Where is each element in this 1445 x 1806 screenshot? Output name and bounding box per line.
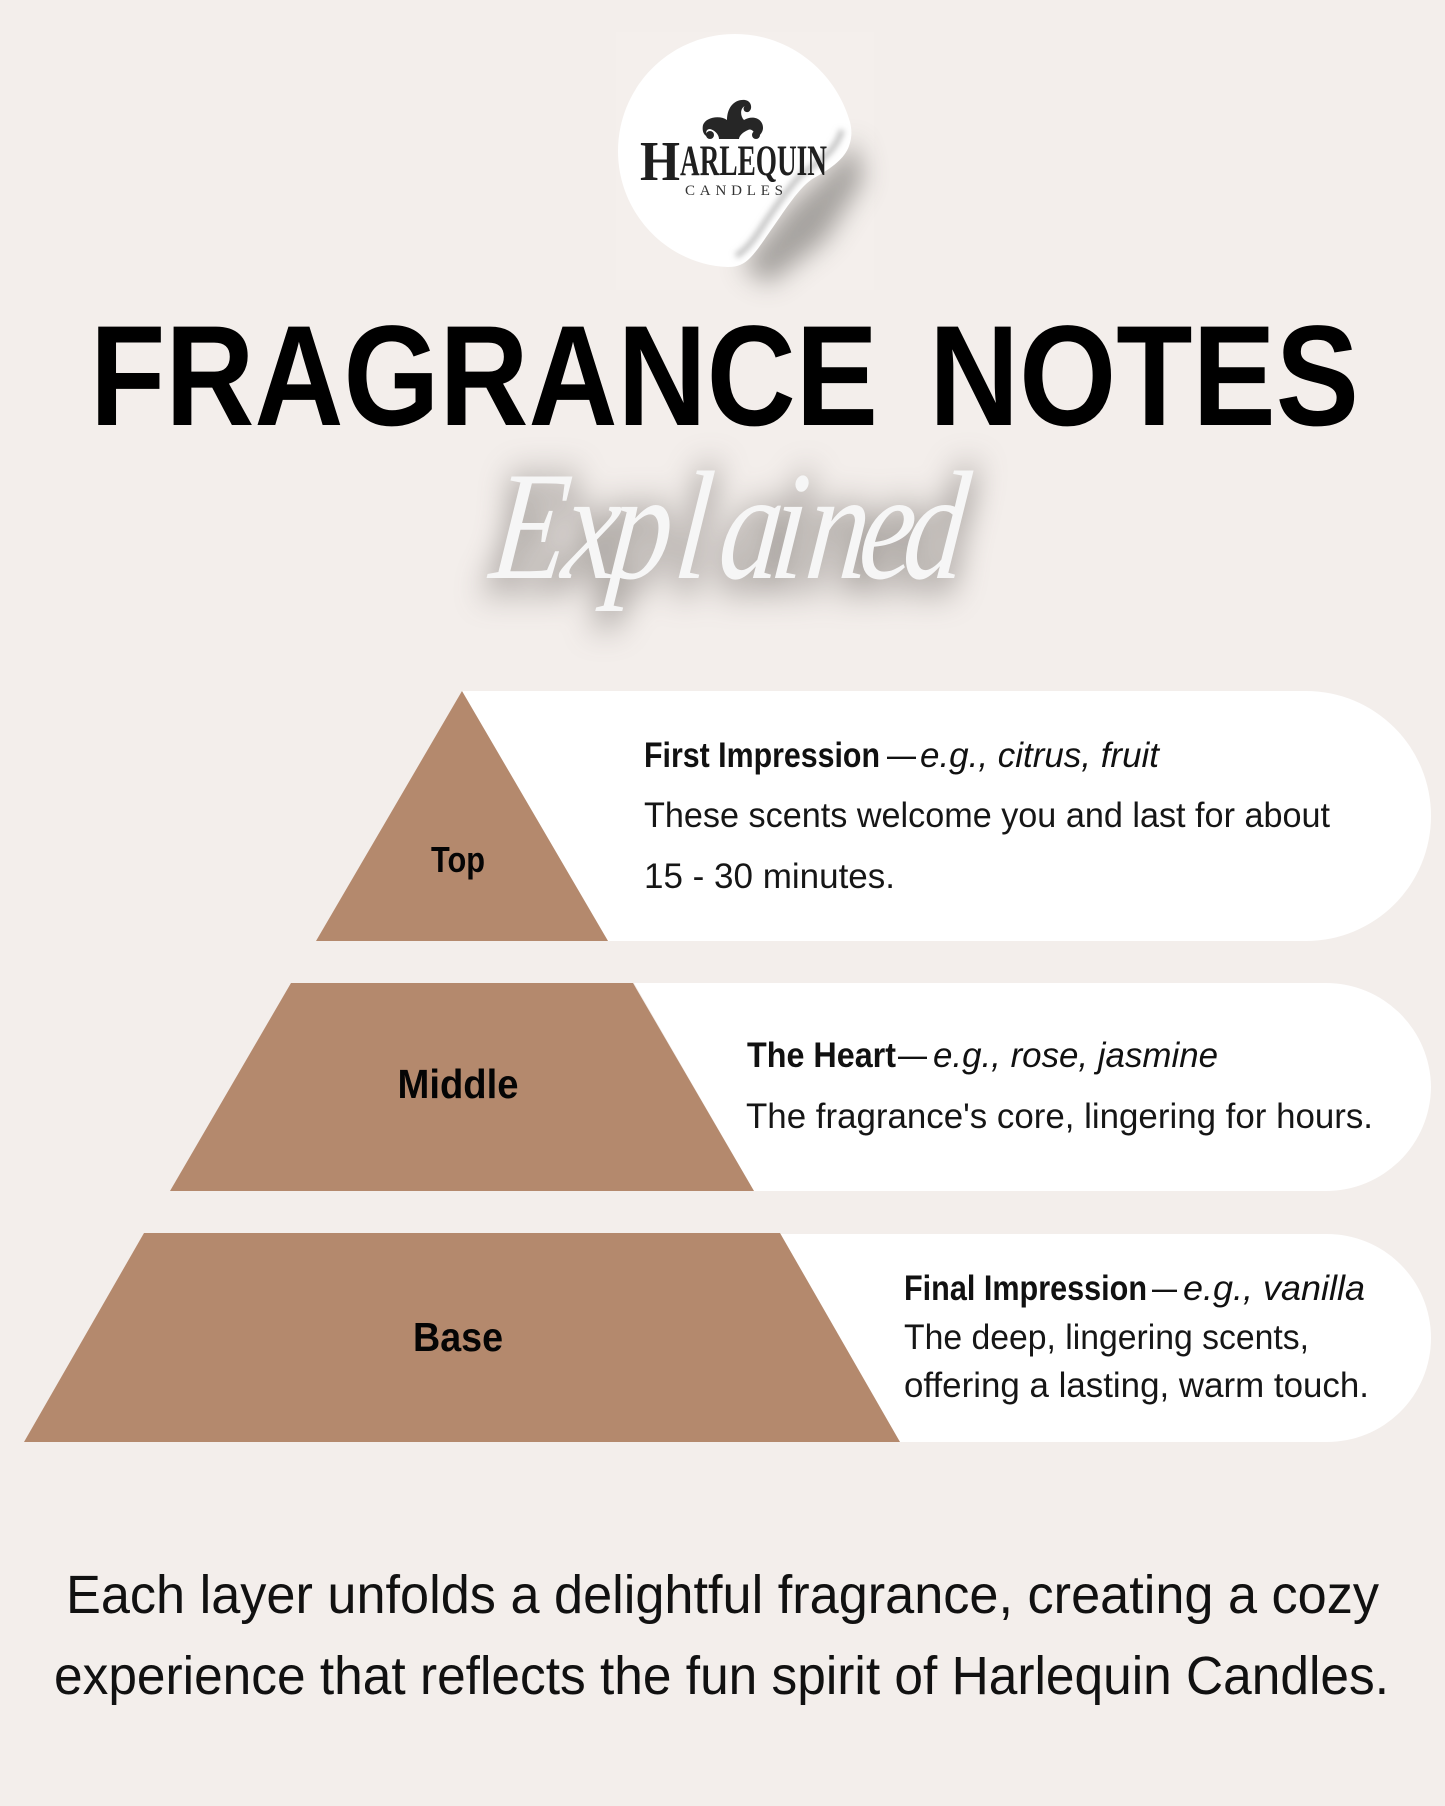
- closing statement: Each layer unfolds a delightful fragrance, creating a cozy: [66, 1565, 1379, 1625]
- text: top heading: First Impression: [644, 736, 880, 775]
- closing statement: [54, 1565, 1389, 1706]
- text: middle heading: [747, 1036, 1218, 1075]
- text: base description line 1: The deep, lingering scents,: [904, 1318, 1309, 1357]
- title: FRAGRANCE: [90, 297, 878, 456]
- pill: middle: [634, 983, 1431, 1191]
- pill: base: [780, 1234, 1431, 1442]
- text: top heading: e.g., citrus, fruit: [920, 736, 1160, 775]
- subtitle: Explained: Explained: [483, 448, 977, 618]
- triangle: top: [316, 691, 608, 941]
- closing statement: experience that reflects the fun spirit of Harlequin Candles.: [54, 1646, 1389, 1706]
- subtitle: Explained: Explained: [483, 442, 977, 612]
- text: top heading: —: [887, 736, 916, 775]
- text: base heading: e.g., vanilla: [1183, 1269, 1365, 1308]
- panel: base layer: [24, 1233, 1431, 1442]
- label: Middle: Middle: [398, 1061, 518, 1107]
- label: Top: Top: [431, 839, 485, 880]
- title: NOTES: [929, 297, 1359, 456]
- text: base description line 2: offering a lasting, warm touch.: [904, 1366, 1369, 1405]
- text: base heading: Final Impression: [904, 1269, 1147, 1308]
- text: middle heading: e.g., rose, jasmine: [933, 1036, 1218, 1075]
- trapezoid: base: [24, 1233, 900, 1442]
- text: top heading: [644, 736, 1160, 775]
- label: Base: Base: [413, 1314, 503, 1360]
- panel: middle layer: [170, 983, 1431, 1191]
- logo wordmark: H: [640, 131, 680, 193]
- panel: top layer: [316, 691, 1431, 941]
- text: middle description: The fragrance's core, lingering for hours.: [746, 1097, 1373, 1136]
- logo wordmark: [640, 131, 827, 193]
- text: middle heading: —: [898, 1036, 927, 1075]
- text: middle heading: The Heart: [747, 1036, 896, 1075]
- icon: jester hat: [703, 100, 763, 139]
- text: top description line 2: 15 - 30 minutes.: [644, 857, 895, 896]
- logo subtitle: CANDLES: [685, 183, 783, 199]
- text: base heading: —: [1152, 1269, 1177, 1308]
- text: base heading: [904, 1269, 1365, 1308]
- logo wordmark: ARLEQUIN: [680, 138, 827, 185]
- trapezoid: middle: [170, 983, 754, 1191]
- text: top description line 1: These scents welcome you and last for about: [644, 796, 1330, 835]
- pill: top: [462, 691, 1431, 941]
- logo sticker: [616, 32, 874, 290]
